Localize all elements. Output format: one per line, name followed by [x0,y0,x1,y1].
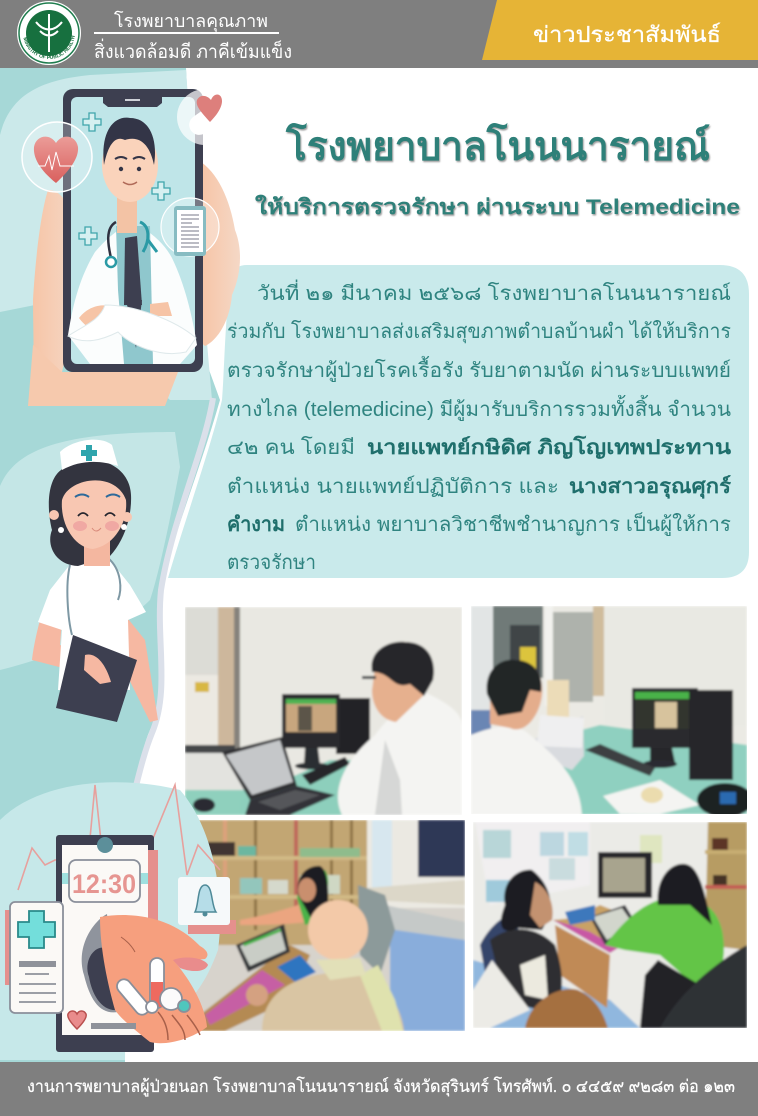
hospital quality heading [94,10,292,63]
icon: light circle backdrop [0,782,220,1060]
body paragraph: ตำแหน่ง พยาบาลวิชาชีพชำนาญการ เป็นผู้ให้การ [295,511,731,537]
photo: patient and nurse at tablet [473,822,747,1028]
illustration: medicine reminder phone and hand [0,782,236,1060]
icon: nurse uniform [38,560,146,690]
icon: nurse arms [32,615,158,722]
icon: clipboard [161,198,219,256]
body paragraph: วันที่ ๒๑ มีนาคม ๒๕๖๘ โรงพยาบาลโนนนารายณ์ [257,279,731,305]
icon: doctor figure [68,118,197,364]
icon: pills [114,958,190,1018]
icon: nurse hand [84,654,111,684]
body paragraph: ร่วมกับ โรงพยาบาลส่งเสริมสุขภาพตำบลบ้านผำ ได้ให้บริการ [227,320,731,344]
photo: doctor at computer on teal desk [185,607,462,815]
body paragraph: ตรวจรักษา [227,552,316,574]
icon: phone body [56,835,154,1052]
gold label: ข่าวประชาสัมพันธ์ [533,22,721,47]
icon: bell notification [178,877,236,934]
icon: clipboard [56,635,137,722]
icon: ecg line [18,785,220,890]
subtitle: ให้บริการตรวจรักษา ผ่านระบบ Telemedicine [255,194,740,219]
body paragraph: ทางไกล (telemedicine) มีผู้มารับบริการรวมทั้งสิ้น จำนวน [227,395,731,422]
icon: hand behind phone [28,190,78,406]
illustration: nurse with clipboard [32,440,158,722]
body paragraph: ตำแหน่ง นายแพทย์ปฏิบัติการ และ [227,475,559,498]
hospital quality heading: สิ่งแวดล้อมดี ภาคีเข้มแข็ง [94,38,292,63]
photo: nurse consulting patient at pharmacy shelves [185,820,465,1031]
illustration: doctor on smartphone [22,89,240,406]
icon: time bubble [69,860,140,902]
photo: doctor from behind with monitor and PC tower [471,606,753,817]
body paragraph: คำงาม [227,514,285,536]
icon: medical card with cross [5,902,63,1013]
icon: nurse hair and face [49,440,132,566]
body paragraph: ๔๒ คน โดยมี [227,436,355,459]
panel: left teal illustration band [0,68,220,1062]
body paragraph: นายแพทย์กษิดิศ ภิญโญเทพประทาน [367,435,731,459]
logo: ministry of public health [17,1,81,65]
icon: pill and heart top right [177,89,233,145]
footer bar [0,1062,758,1116]
header bar [0,0,758,68]
body paragraph: นางสาวอรุณศุกร์ [569,475,731,499]
icon: small heart and bar [68,1011,136,1029]
body paragraph [227,279,731,574]
hospital quality heading: โรงพยาบาลคุณภาพ [114,10,268,32]
icon: phone frame [63,89,203,372]
title: โรงพยาบาลโนนนารายณ์ [285,123,710,169]
body paragraph: ตรวจรักษาผู้ป่วยโรคเรื้อรัง รับยาตามนัด ผ่านระบบแพทย์ [227,356,731,383]
gold label [482,0,758,60]
icon: hand holding pills [82,914,208,1043]
icon: plus signs [79,113,170,245]
footer bar: งานการพยาบาลผู้ป่วยนอก โรงพยาบาลโนนนารายณ์ จังหวัดสุรินทร์ โทรศัพท์. ๐ ๔๔๕๙ ๙๒๘๓ ต่อ ๑๒๓ [27,1076,735,1097]
logo: ministry of public health: MINISTRY OF PUBLIC HEALTH [24,36,75,59]
panel: body text box [168,265,749,578]
icon: time bubble: 12:30 [72,869,136,899]
icon: heart with pulse [22,122,92,192]
